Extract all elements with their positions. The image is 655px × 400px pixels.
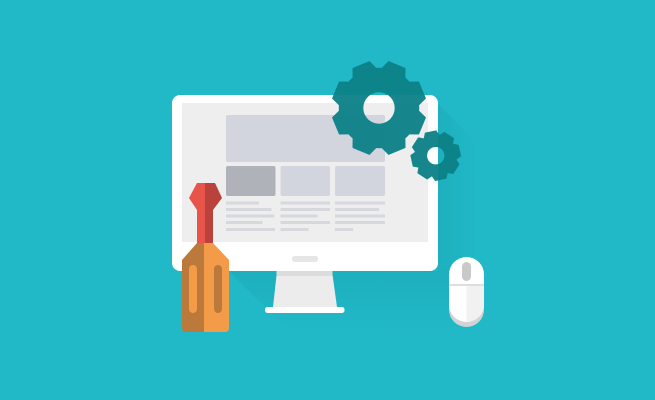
monitor bottom shadow: [229, 271, 476, 330]
monitor power button: [292, 256, 318, 262]
thumbnail right: [335, 166, 385, 196]
monitor body: [172, 95, 438, 271]
monitor stand: [265, 271, 344, 313]
icon: mouse: [449, 257, 484, 327]
hero banner: [226, 115, 385, 162]
text lines column 2: [280, 202, 330, 231]
screen: [182, 103, 428, 242]
thumbnail middle: [280, 166, 330, 196]
thumbnail left: [226, 166, 276, 196]
screwdriver tip and shaft: [189, 183, 222, 243]
icon: screwdriver: [182, 183, 229, 332]
icon: small gear: [410, 130, 461, 181]
icon: large gear: [332, 61, 426, 155]
text lines column 1: [226, 202, 275, 231]
screwdriver handle: [182, 243, 229, 332]
text lines column 3: [335, 202, 385, 231]
monitor side shadow: [438, 104, 476, 271]
monitor: [172, 95, 438, 313]
